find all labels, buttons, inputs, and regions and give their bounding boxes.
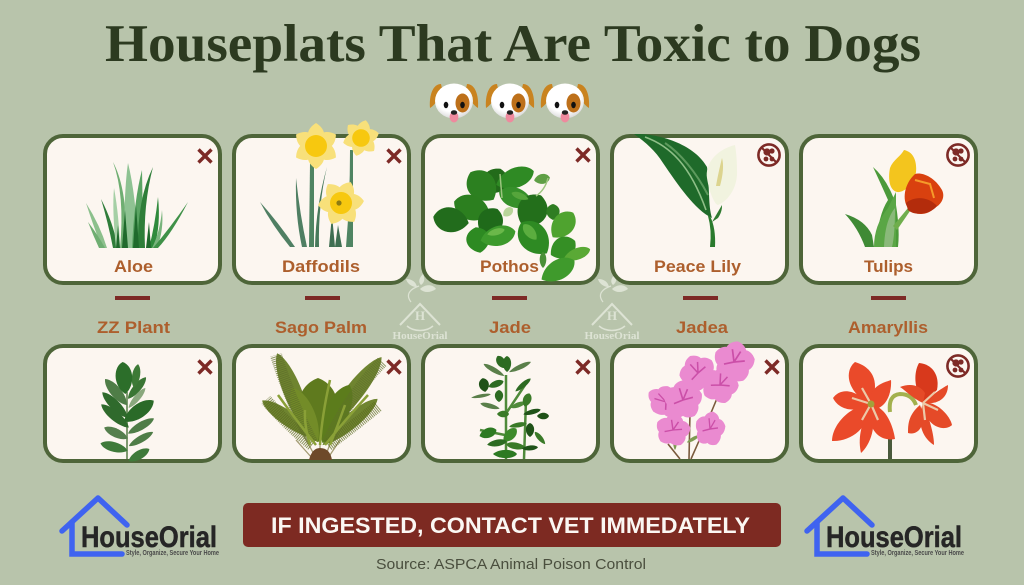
row 2 labels: Jadea (676, 319, 729, 337)
label: Pothos (480, 258, 539, 276)
icon: azalea plant (640, 337, 760, 459)
icon: daffodil plant (260, 115, 384, 247)
panel: daffodils (234, 115, 409, 283)
title: Houseplats That Are Toxic to Dogs (105, 15, 921, 73)
icon: toxic cross (576, 148, 590, 162)
icon: toxic cross (198, 360, 212, 374)
panel: jade (423, 346, 598, 461)
icon: toxic cross (766, 360, 778, 374)
warning banner (243, 503, 781, 547)
row 2 labels: Sago Palm (275, 319, 367, 337)
watermark: right (584, 274, 640, 342)
icon: toxic cross (198, 150, 212, 162)
dog emoji row (430, 84, 589, 122)
icon: zz plant (98, 361, 158, 465)
panel: sago palm (234, 346, 409, 461)
icon: sago palm (258, 350, 389, 460)
icon: no pets (947, 355, 969, 377)
icon: no pets (947, 144, 969, 166)
logo: left (62, 498, 219, 557)
panel: peace lily (612, 134, 787, 283)
icon: pothos plant (431, 162, 592, 288)
icon: amaryllis plant (832, 362, 952, 459)
panel: amaryllis (801, 346, 976, 461)
panel: tulips (801, 136, 976, 283)
divider dashes (115, 296, 906, 300)
label: Daffodils (282, 258, 360, 276)
icon: peace lily plant (634, 134, 737, 247)
label: Peace Lily (654, 258, 742, 276)
icon: toxic cross (388, 360, 400, 374)
row 2 labels: Jade (489, 319, 531, 337)
watermark: left (392, 274, 448, 342)
row 2 labels: Amaryllis (848, 319, 928, 337)
panel: pothos (423, 136, 598, 288)
panel: zz plant (45, 346, 220, 465)
logo: right (807, 498, 964, 557)
icon: jade plant (471, 354, 549, 459)
icon: aloe plant (86, 162, 188, 248)
icon: toxic cross (576, 360, 590, 374)
icon: no pets (758, 144, 780, 166)
icon: toxic cross (388, 150, 400, 162)
row 2 labels: ZZ Plant (97, 319, 171, 337)
source: Source: ASPCA Animal Poison Control (376, 556, 646, 573)
panel: aloe (45, 136, 220, 283)
label: Tulips (864, 258, 913, 276)
warning banner: IF INGESTED, CONTACT VET IMMEDATELY (271, 513, 750, 538)
label: Aloe (114, 258, 153, 276)
panel: jadea (612, 337, 787, 461)
icon: tulip plant (845, 150, 943, 247)
row 2 labels (97, 319, 928, 337)
